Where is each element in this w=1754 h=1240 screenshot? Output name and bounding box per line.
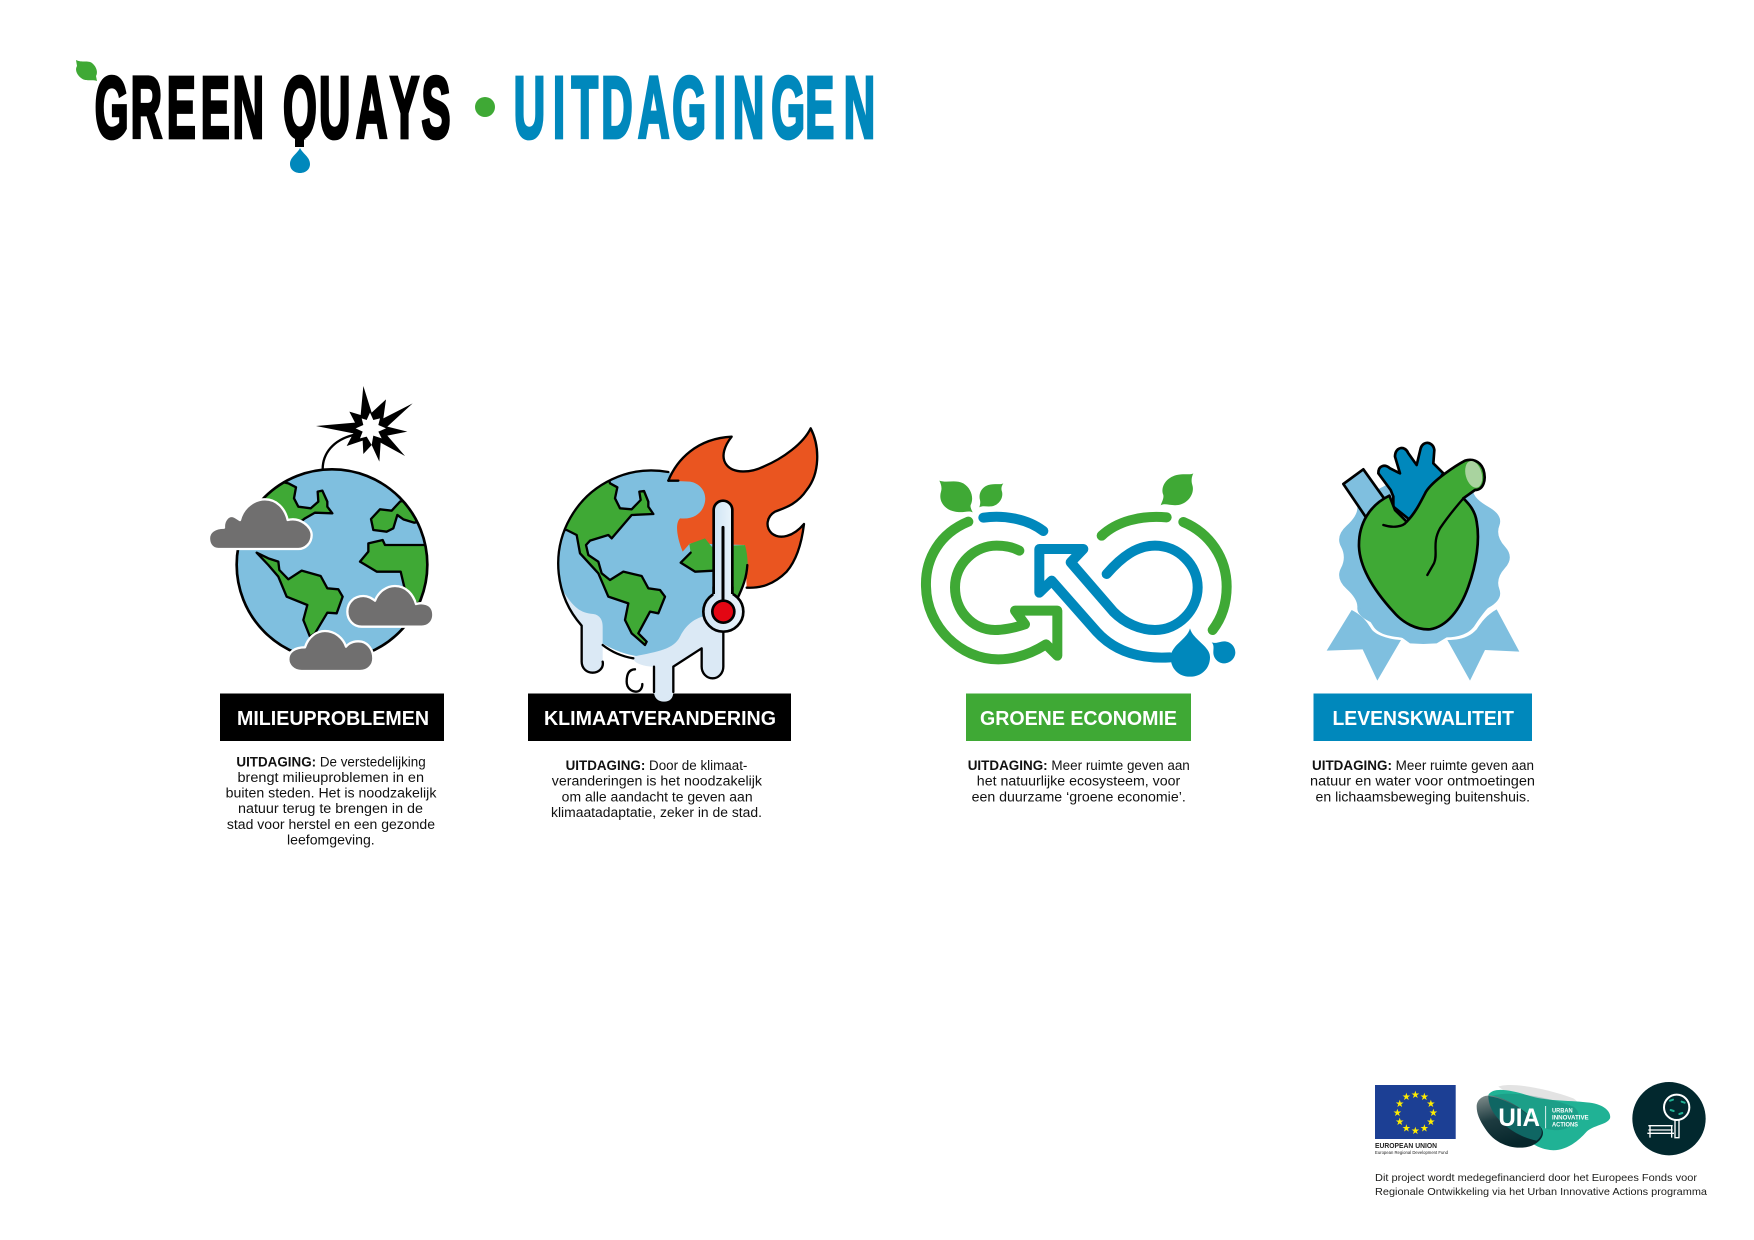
title: Uitdagingen: UITDAGINGEN	[514, 59, 875, 156]
text: milieuproblemen: natuur terug te brengen in de	[238, 801, 423, 816]
logo: European Union: ★	[1411, 1126, 1420, 1137]
panel: klimaatverandering	[528, 428, 817, 820]
heading: klimaatverandering	[528, 694, 791, 741]
logo: European Union: ★	[1426, 1117, 1435, 1128]
text: klimaatverandering: om alle aandacht te geven aan	[562, 790, 753, 804]
text: milieuproblemen: brengt milieuproblemen in en	[238, 770, 424, 785]
logos and funding note	[1375, 1082, 1707, 1198]
text: groene economie: een duurzame ‘groene economie’.	[972, 790, 1186, 804]
panel: levenskwaliteit	[1310, 443, 1535, 804]
text: levenskwaliteit	[1310, 758, 1535, 804]
logo: European Union: ★	[1429, 1108, 1438, 1119]
separator dot	[475, 97, 495, 117]
text: milieuproblemen: UITDAGING: De verstedelijking	[236, 754, 426, 770]
logo: European Union: ★	[1426, 1099, 1435, 1110]
title: Green Quays: QUAYS	[283, 59, 451, 156]
logo: Urban Innovative Actions: UIA	[1498, 1104, 1540, 1132]
icon: melting earth on fire	[550, 428, 817, 702]
text: levenskwaliteit: en lichaamsbeweging buitenshuis.	[1316, 790, 1530, 804]
text: klimaatverandering: veranderingen is het noodzakelijk	[552, 774, 762, 788]
logo: Urban Innovative Actions: ACTIONS	[1552, 1122, 1578, 1129]
heading: levenskwaliteit: LEVENSKWALITEIT	[1332, 708, 1514, 730]
panel: milieuproblemen	[209, 386, 444, 848]
text: groene economie	[968, 758, 1190, 804]
heading: groene economie	[966, 694, 1191, 741]
heading: groene economie: GROENE ECONOMIE	[980, 708, 1177, 730]
logo: European Union: ★	[1402, 1123, 1411, 1134]
icon: circular infinity loop	[926, 473, 1235, 677]
logo: European Union: ★	[1395, 1099, 1404, 1110]
heading: klimaatverandering: KLIMAATVERANDERING	[544, 708, 776, 730]
logo: European Union: EUROPEAN UNION	[1375, 1143, 1437, 1150]
icon: water drop	[290, 148, 310, 173]
logo: Green Quays tree and bench	[1632, 1082, 1706, 1155]
logo: Urban Innovative Actions	[1477, 1085, 1610, 1150]
title: Green Quays	[95, 59, 451, 158]
logo: European Union: ★	[1420, 1123, 1429, 1134]
heading: milieuproblemen	[220, 694, 444, 741]
heading: milieuproblemen: MILIEUPROBLEMEN	[237, 708, 429, 730]
logo: European Union: ★	[1402, 1092, 1411, 1103]
text: milieuproblemen: stad voor herstel en een gezonde	[227, 817, 435, 832]
text: milieuproblemen: leefomgeving.	[287, 832, 375, 848]
text: klimaatverandering: UITDAGING: Door de klimaat-	[566, 758, 747, 773]
heading: levenskwaliteit	[1314, 694, 1532, 741]
panel: groene economie	[926, 473, 1235, 804]
text: klimaatverandering: klimaatadaptatie, zeker in de stad.	[551, 805, 762, 820]
logo: European Union	[1375, 1085, 1456, 1155]
icon: leaf	[76, 60, 97, 81]
logo: European Union: European Regional Development Fund	[1375, 1150, 1448, 1155]
text: levenskwaliteit: UITDAGING: Meer ruimte geven aan	[1312, 758, 1534, 773]
logo: Urban Innovative Actions: URBAN	[1552, 1108, 1573, 1115]
text: milieuproblemen: buiten steden. Het is noodzakelijk	[226, 786, 437, 800]
funding note: Dit project wordt medegefinancierd door het Europees Fonds voor	[1375, 1172, 1698, 1184]
title: Green Quays: GREEN	[95, 59, 264, 156]
icon: heart on a rosette	[1327, 443, 1519, 681]
title	[76, 59, 875, 173]
funding note	[1375, 1172, 1707, 1198]
text: klimaatverandering	[551, 758, 762, 820]
funding note: Regionale Ontwikkeling via het Urban Innovative Actions programma	[1375, 1186, 1707, 1198]
text: groene economie: het natuurlijke ecosysteem, voor	[977, 774, 1181, 788]
text: milieuproblemen	[226, 754, 437, 848]
logo: European Union: ★	[1420, 1092, 1429, 1103]
logo: Urban Innovative Actions: INNOVATIVE	[1552, 1115, 1589, 1122]
text: groene economie: UITDAGING: Meer ruimte geven aan	[968, 758, 1190, 773]
logo: European Union: ★	[1395, 1117, 1404, 1128]
text: levenskwaliteit: natuur en water voor ontmoetingen	[1310, 774, 1535, 788]
logo: European Union: ★	[1411, 1090, 1420, 1101]
logo: European Union: ★	[1393, 1108, 1402, 1119]
icon: earth as a bomb	[209, 386, 433, 671]
